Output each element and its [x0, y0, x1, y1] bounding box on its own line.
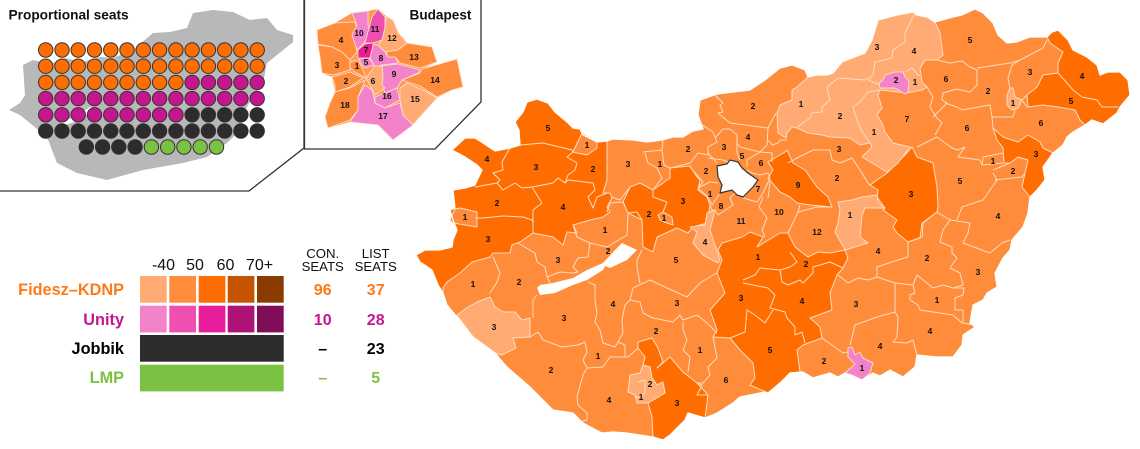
- legend row: LMP: [90, 365, 380, 391]
- constituency numbers: 3: [562, 313, 567, 323]
- medium orange enclaves: [450, 133, 673, 227]
- legend row: Jobbik: Jobbik: [72, 340, 125, 358]
- district numbers: 14: [430, 75, 440, 85]
- legend row: Unity: 10: [314, 312, 332, 329]
- constituency numbers: 1: [913, 77, 918, 87]
- panel: proportional seats inset: [0, 0, 304, 191]
- constituency numbers: 6: [759, 158, 764, 168]
- country base: [416, 9, 1130, 440]
- constituency numbers: 8: [719, 201, 724, 211]
- district numbers: 7: [364, 45, 369, 55]
- main map of Hungary: [416, 9, 1130, 440]
- pink constituencies: [845, 72, 909, 380]
- constituency numbers: 2: [686, 144, 691, 154]
- district numbers: 1: [355, 61, 360, 71]
- constituency numbers: 4: [928, 326, 933, 336]
- constituency numbers: 4: [746, 132, 751, 142]
- constituency numbers: 3: [976, 267, 981, 277]
- constituency numbers: 3: [534, 162, 539, 172]
- light orange constituencies: [457, 12, 1022, 403]
- constituency numbers: 5: [1069, 96, 1074, 106]
- constituency numbers: 2: [648, 379, 653, 389]
- constituency numbers: 1: [799, 99, 804, 109]
- constituency numbers: 5: [958, 176, 963, 186]
- legend range labels: 70+: [246, 257, 273, 274]
- Budapest cut-out: [717, 160, 758, 197]
- legend: [18, 246, 397, 391]
- constituency numbers: 4: [561, 202, 566, 212]
- constituency numbers: 2: [654, 326, 659, 336]
- legend row: Unity: Unity: [83, 311, 124, 329]
- constituency numbers: 4: [912, 46, 917, 56]
- constituency numbers: 1: [658, 159, 663, 169]
- district numbers: 16: [382, 91, 392, 101]
- district numbers: 2: [344, 76, 349, 86]
- constituency numbers: 3: [1028, 67, 1033, 77]
- constituency numbers: 1: [708, 189, 713, 199]
- legend column headers: LIST: [362, 246, 390, 261]
- legend column headers: CON.: [306, 246, 339, 261]
- constituency numbers: 3: [556, 255, 561, 265]
- legend row: Fidesz-KDNP: [18, 276, 385, 303]
- constituency numbers: 1: [848, 210, 853, 220]
- constituency numbers: 2: [647, 209, 652, 219]
- panel frame: [304, 0, 481, 149]
- panel: Budapest inset: [304, 0, 481, 149]
- constituency numbers: 7: [756, 184, 761, 194]
- constituency numbers: 4: [876, 246, 881, 256]
- constituency numbers: 1: [639, 392, 644, 402]
- constituency numbers: 2: [704, 166, 709, 176]
- constituency numbers: 1: [463, 212, 468, 222]
- heading: Budapest: Budapest: [410, 8, 472, 22]
- silhouette Balaton hole: [60, 107, 95, 125]
- constituency numbers: 2: [838, 111, 843, 121]
- legend row: Jobbik: [72, 335, 385, 362]
- district numbers: 5: [364, 57, 369, 67]
- constituency numbers: 1: [585, 140, 590, 150]
- legend row: LMP: 5: [371, 370, 380, 387]
- legend row: LMP: –: [318, 370, 327, 387]
- district numbers: 9: [392, 69, 397, 79]
- constituency numbers: 3: [675, 298, 680, 308]
- constituency numbers: 4: [1080, 71, 1085, 81]
- constituency numbers: 6: [724, 375, 729, 385]
- constituency numbers: 3: [722, 142, 727, 152]
- district numbers: 15: [410, 94, 420, 104]
- constituency numbers: 1: [991, 156, 996, 166]
- constituency numbers: 3: [492, 322, 497, 332]
- constituency numbers: 2: [822, 356, 827, 366]
- Budapest hull: [317, 9, 463, 140]
- district numbers: 11: [370, 24, 380, 34]
- constituency numbers: 4: [703, 237, 708, 247]
- constituency numbers: [463, 35, 1085, 408]
- district numbers: 12: [387, 33, 397, 43]
- grey Hungary silhouette: [9, 10, 293, 180]
- legend row: Fidesz-KDNP: 37: [367, 282, 385, 299]
- legend range labels: [152, 257, 273, 274]
- constituency numbers: 4: [485, 154, 490, 164]
- legend range labels: 60: [217, 257, 234, 274]
- district numbers: 17: [378, 111, 388, 121]
- legend row: Jobbik: –: [318, 341, 327, 358]
- constituency numbers: 5: [740, 151, 745, 161]
- constituency numbers: 1: [860, 363, 865, 373]
- constituency numbers: 3: [681, 196, 686, 206]
- legend row: Fidesz-KDNP: 96: [314, 282, 332, 299]
- legend column headers: SEATS: [355, 259, 397, 274]
- constituency numbers: 1: [603, 225, 608, 235]
- legend range labels: 50: [186, 257, 204, 274]
- constituency numbers: 4: [607, 395, 612, 405]
- legend column headers: SEATS: [302, 259, 344, 274]
- constituency numbers: 2: [1011, 166, 1016, 176]
- district numbers: 3: [335, 60, 340, 70]
- constituency numbers: 5: [674, 255, 679, 265]
- district numbers: 13: [409, 52, 419, 62]
- constituency boundaries: [475, 13, 1118, 422]
- constituency numbers: 1: [596, 351, 601, 361]
- white coastline trim: [416, 9, 1130, 440]
- constituency numbers: 3: [909, 189, 914, 199]
- constituency numbers: 3: [837, 144, 842, 154]
- constituency numbers: 2: [925, 253, 930, 263]
- constituency numbers: 3: [854, 299, 859, 309]
- legend range labels: -40: [152, 257, 175, 274]
- constituency numbers: 1: [698, 345, 703, 355]
- constituency numbers: 1: [1011, 98, 1016, 108]
- constituency numbers: 3: [1034, 149, 1039, 159]
- constituency numbers: 5: [546, 123, 551, 133]
- constituency numbers: 2: [495, 198, 500, 208]
- heading: proportional seats: Proportional seats: [8, 8, 129, 22]
- constituency numbers: 1: [935, 295, 940, 305]
- legend row: Unity: 28: [367, 312, 385, 329]
- constituency numbers: 6: [1039, 118, 1044, 128]
- legend row: Fidesz-KDNP: Fidesz–KDNP: [18, 281, 124, 299]
- constituency numbers: 3: [626, 159, 631, 169]
- constituency numbers: 10: [774, 207, 784, 217]
- constituency numbers: 2: [986, 86, 991, 96]
- district numbers: 18: [340, 100, 350, 110]
- constituency numbers: 6: [965, 123, 970, 133]
- district numbers: 6: [371, 76, 376, 86]
- district numbers: 8: [379, 53, 384, 63]
- constituency numbers: 1: [756, 252, 761, 262]
- district numbers: 4: [339, 35, 344, 45]
- constituency numbers: 2: [549, 365, 554, 375]
- constituency numbers: 4: [996, 211, 1001, 221]
- constituency numbers: 5: [768, 345, 773, 355]
- constituency numbers: 2: [804, 259, 809, 269]
- constituency numbers: 2: [751, 101, 756, 111]
- constituency numbers: 9: [796, 180, 801, 190]
- legend row: Unity: [83, 306, 385, 332]
- constituency numbers: 2: [835, 173, 840, 183]
- district numbers: [335, 24, 440, 121]
- constituency numbers: 7: [905, 114, 910, 124]
- dark orange constituencies: [416, 30, 1130, 440]
- district numbers: 10: [354, 28, 364, 38]
- constituency numbers: 2: [894, 75, 899, 85]
- constituency numbers: 12: [812, 227, 822, 237]
- Lake Balaton: [537, 243, 637, 295]
- panel frame: [0, 0, 304, 191]
- constituency numbers: 2: [517, 277, 522, 287]
- constituency numbers: 1: [872, 127, 877, 137]
- constituency numbers: 1: [662, 213, 667, 223]
- legend row: LMP: LMP: [90, 369, 124, 387]
- constituency numbers: 3: [486, 234, 491, 244]
- legend column headers: [302, 246, 397, 274]
- constituency numbers: 4: [611, 299, 616, 309]
- constituency numbers: 11: [736, 216, 746, 226]
- constituency numbers: 5: [968, 35, 973, 45]
- Budapest districts: [317, 9, 463, 140]
- constituency numbers: 4: [800, 296, 805, 306]
- constituency numbers: 3: [739, 293, 744, 303]
- seat dots: [38, 43, 264, 154]
- constituency numbers: 3: [675, 398, 680, 408]
- constituency numbers: 1: [471, 279, 476, 289]
- constituency numbers: 3: [875, 42, 880, 52]
- constituency numbers: 6: [944, 74, 949, 84]
- constituency numbers: 2: [591, 164, 596, 174]
- constituency numbers: 4: [878, 341, 883, 351]
- legend row: Jobbik: 23: [367, 341, 385, 358]
- constituency numbers: 2: [606, 246, 611, 256]
